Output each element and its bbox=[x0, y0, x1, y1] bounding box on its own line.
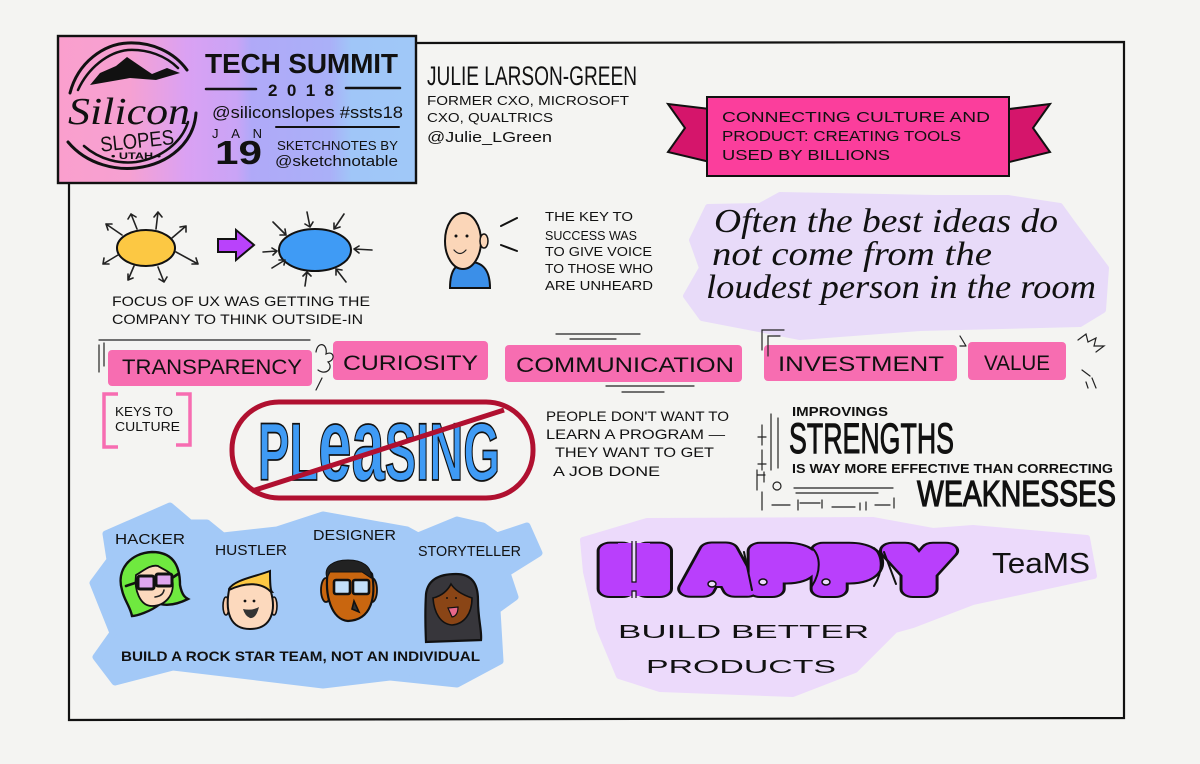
heading: Tech Summit: TECH SUMMIT bbox=[205, 48, 398, 79]
tag: communication: COMMUNICATION bbox=[516, 354, 734, 377]
caption bbox=[618, 622, 869, 677]
logo: Silicon Slopes Utah bbox=[68, 43, 196, 168]
caption: PRODUCTS bbox=[646, 657, 836, 677]
panel: rock star team bbox=[93, 506, 539, 685]
speaker name and titles: @Julie_LGreen bbox=[427, 129, 552, 146]
persona: designer bbox=[313, 527, 396, 621]
purple arrow bbox=[218, 230, 254, 260]
tag: curiosity: CURIOSITY bbox=[343, 352, 478, 375]
caption: FOCUS OF UX WAS GETTING THE bbox=[112, 293, 370, 309]
keys to culture row bbox=[99, 330, 1104, 392]
tag: communication bbox=[505, 345, 742, 382]
banner: session title bbox=[668, 97, 1050, 176]
text: get a job done: THEY WANT TO GET bbox=[555, 444, 715, 460]
quote: best ideas: not come from the bbox=[712, 236, 992, 273]
quote: best ideas: Often the best ideas do bbox=[714, 203, 1058, 240]
panel: happy teams bbox=[583, 520, 1094, 694]
speaker name and titles bbox=[427, 61, 637, 146]
date: 19 bbox=[215, 134, 262, 171]
text: strengths versus weaknesses: IS WAY MORE EFFECTIVE THAN CORRECTING bbox=[792, 462, 1113, 476]
social handles: @siliconslopes #ssts18 bbox=[212, 103, 403, 122]
persona: designer: DESIGNER bbox=[313, 527, 396, 544]
label: keys to culture bbox=[104, 394, 190, 447]
yellow inward-looking company bbox=[103, 212, 198, 282]
quote: best ideas bbox=[686, 195, 1106, 337]
text: key to success: TO GIVE VOICE bbox=[545, 245, 652, 259]
tag: value bbox=[968, 342, 1066, 380]
persona: hacker bbox=[115, 531, 188, 616]
text: key to success: THE KEY TO bbox=[545, 210, 633, 224]
panel: event header bbox=[58, 36, 416, 183]
text: strengths versus weaknesses bbox=[757, 404, 1116, 514]
banner: session title: USED BY BILLIONS bbox=[722, 147, 890, 164]
speaker name and titles: FORMER CXO, MICROSOFT bbox=[427, 93, 629, 108]
text: key to success: ARE UNHEARD bbox=[545, 279, 653, 293]
persona: hustler: HUSTLER bbox=[215, 542, 287, 559]
blue outward-looking company bbox=[263, 212, 372, 286]
banner: session title: CONNECTING CULTURE AND bbox=[722, 109, 990, 126]
tag: value: VALUE bbox=[984, 352, 1050, 375]
tag: transparency: TRANSPARENCY bbox=[122, 356, 302, 379]
crossed-out word: pleasing: PLeaSING bbox=[258, 387, 500, 503]
persona: storyteller bbox=[418, 543, 521, 642]
tag: investment: INVESTMENT bbox=[778, 353, 944, 376]
word: happy: HAPPY bbox=[604, 539, 947, 602]
diagram: outside-in bbox=[103, 212, 372, 327]
year 2018: 2018 bbox=[268, 81, 334, 100]
logo: Silicon Slopes Utah: • UTAH • bbox=[111, 151, 161, 161]
icon: speaking person bbox=[445, 213, 517, 288]
text: get a job done: LEARN A PROGRAM — bbox=[546, 426, 725, 442]
text: key to success: TO THOSE WHO bbox=[545, 262, 653, 276]
date: JAN bbox=[212, 126, 262, 141]
tag: transparency bbox=[108, 350, 312, 386]
text: get a job done bbox=[546, 408, 729, 479]
text: key to success bbox=[545, 210, 653, 293]
sketchnotes credit: @sketchnotable bbox=[275, 153, 398, 170]
word: happy: HAPPY bbox=[604, 539, 947, 602]
tag: investment bbox=[764, 345, 957, 381]
persona: hustler bbox=[215, 542, 287, 629]
text: strengths versus weaknesses: IMPROVINGS bbox=[792, 404, 888, 419]
text: key to success: SUCCESS WAS bbox=[545, 229, 637, 243]
word: teams: TeaMS bbox=[992, 548, 1090, 580]
tag: curiosity bbox=[333, 341, 488, 380]
caption bbox=[112, 293, 370, 327]
date bbox=[212, 126, 262, 171]
label: keys to culture: CULTURE bbox=[115, 419, 180, 434]
speaker name and titles: JULIE LARSON-GREEN bbox=[427, 61, 637, 91]
caption: BUILD A ROCK STAR TEAM, NOT AN INDIVIDUAL bbox=[121, 648, 480, 664]
sketchnotes credit bbox=[275, 127, 399, 170]
quote: best ideas: loudest person in the room bbox=[706, 269, 1096, 306]
text: strengths versus weaknesses: STRENGTHS bbox=[789, 415, 954, 463]
page frame bbox=[69, 42, 1124, 720]
speaker name and titles: CXO, QUALTRICS bbox=[427, 110, 553, 125]
banner: session title: PRODUCT: CREATING TOOLS bbox=[722, 128, 961, 145]
persona: hacker: HACKER bbox=[115, 531, 185, 548]
caption: BUILD BETTER bbox=[618, 622, 869, 642]
text: strengths versus weaknesses: WEAKNESSES bbox=[917, 473, 1116, 514]
sketchnotes credit: SKETCHNOTES BY bbox=[277, 138, 398, 153]
logo: Silicon Slopes Utah: SLOPES bbox=[99, 126, 175, 157]
persona: storyteller: STORYTELLER bbox=[418, 543, 521, 560]
text: get a job done: PEOPLE DON'T WANT TO bbox=[546, 408, 729, 424]
logo: Silicon Slopes Utah: Silicon bbox=[68, 91, 190, 133]
label: keys to culture: KEYS TO bbox=[115, 404, 173, 419]
text: get a job done: A JOB DONE bbox=[553, 463, 660, 479]
caption: COMPANY TO THINK OUTSIDE-IN bbox=[112, 311, 363, 327]
